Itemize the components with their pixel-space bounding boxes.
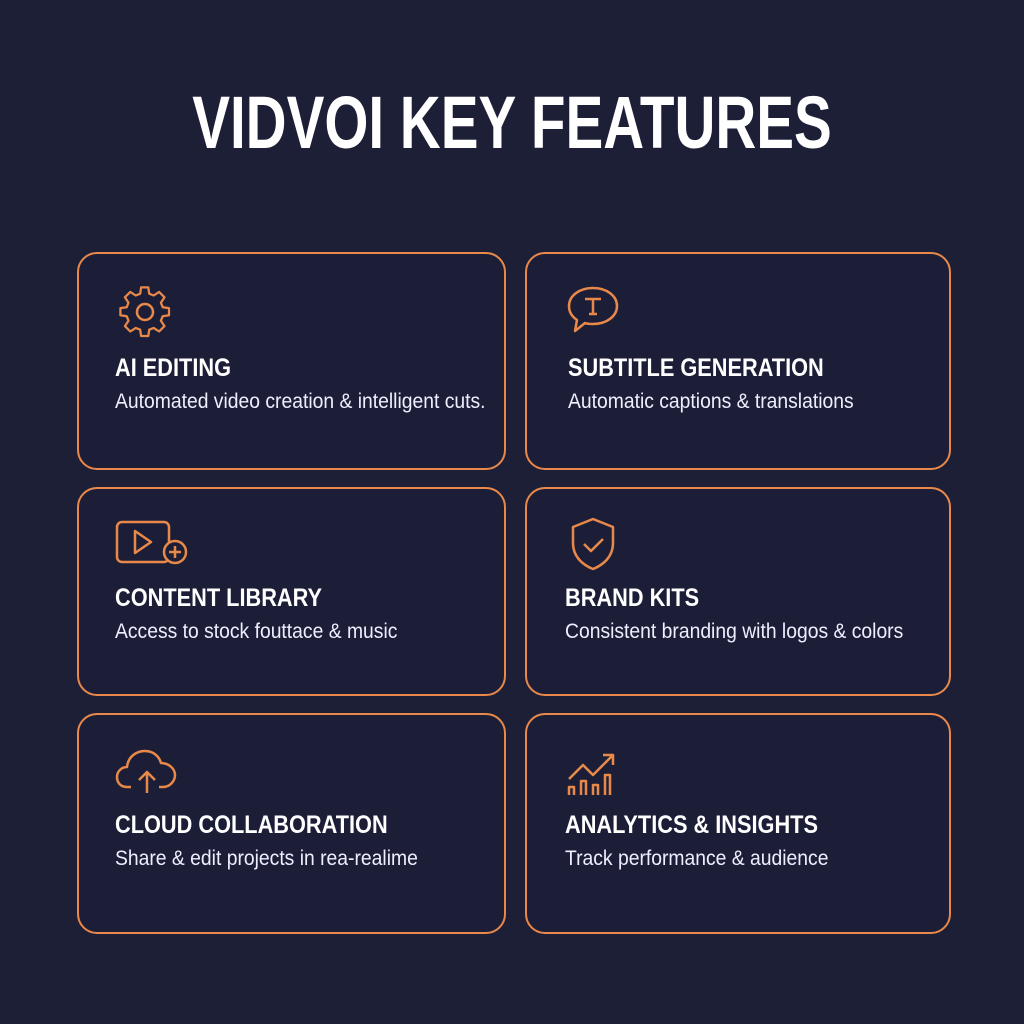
panel: ai editing bbox=[77, 252, 506, 470]
text: Access to stock fouttace & music bbox=[115, 620, 397, 643]
icon: shield check bbox=[572, 518, 614, 570]
heading: BRAND KITS bbox=[565, 584, 699, 612]
panel: content library bbox=[77, 487, 506, 696]
icon: speech bubble T bbox=[568, 286, 618, 332]
text: Consistent branding with logos & colors bbox=[565, 620, 903, 643]
panel: brand kits bbox=[525, 487, 951, 696]
icon: cloud upload bbox=[116, 750, 176, 793]
heading: ANALYTICS & INSIGHTS bbox=[565, 811, 818, 839]
text: Track performance & audience bbox=[565, 847, 828, 870]
text: Share & edit projects in rea-realime bbox=[115, 847, 418, 870]
icon: video plus bbox=[116, 520, 188, 564]
icon: bar chart growth bbox=[568, 754, 614, 795]
heading: AI EDITING bbox=[115, 354, 231, 382]
heading: CONTENT LIBRARY bbox=[115, 584, 322, 612]
text: Automatic captions & translations bbox=[568, 390, 854, 413]
text: Automated video creation & intelligent cuts. bbox=[115, 390, 486, 413]
panel: analytics bbox=[525, 713, 951, 934]
icon: gear bbox=[119, 286, 170, 338]
heading: CLOUD COLLABORATION bbox=[115, 811, 388, 839]
panel: subtitle generation bbox=[525, 252, 951, 470]
title: VIDVOI KEY FEATURES bbox=[192, 81, 832, 164]
panel: cloud collaboration bbox=[77, 713, 506, 934]
heading: SUBTITLE GENERATION bbox=[568, 354, 824, 382]
